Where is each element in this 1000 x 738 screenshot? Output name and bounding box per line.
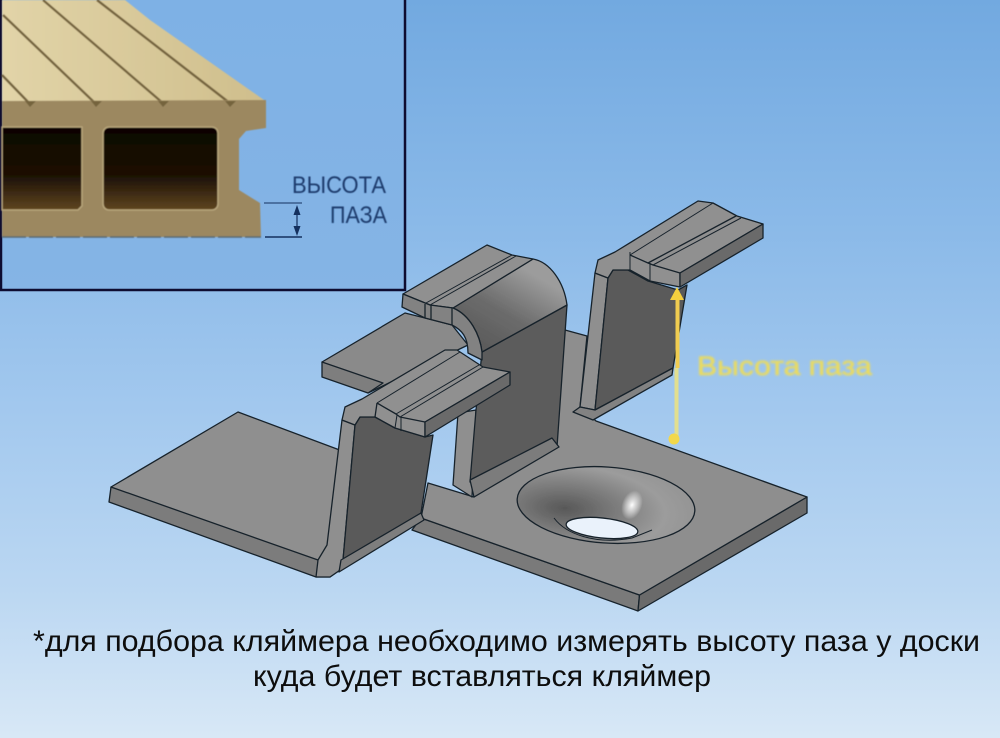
arrow: groove height	[668, 287, 684, 444]
clip fastener 3D drawing	[109, 201, 807, 611]
inset label: ВЫСОТА	[292, 172, 386, 199]
middle clip	[402, 245, 567, 497]
footnote text: *для подбора кляймера необходимо измерять высоту паза у доски	[33, 625, 980, 658]
panel: board cross-section inset	[1, 0, 405, 290]
countersink	[515, 461, 697, 549]
inset label	[292, 172, 387, 229]
base plate with countersunk hole	[412, 330, 807, 611]
inset background with border	[1, 0, 405, 290]
groove height dimension	[264, 203, 302, 237]
footnote text: куда будет вставляться кляймер	[253, 660, 711, 693]
inset label: ПАЗА	[330, 202, 387, 229]
right clip	[573, 201, 763, 420]
footnote text	[33, 625, 980, 693]
label: groove height: Высота паза	[697, 351, 873, 381]
front clip	[316, 350, 510, 577]
left tab	[109, 412, 345, 577]
back tab	[322, 313, 468, 393]
decking board	[2, 0, 266, 237]
